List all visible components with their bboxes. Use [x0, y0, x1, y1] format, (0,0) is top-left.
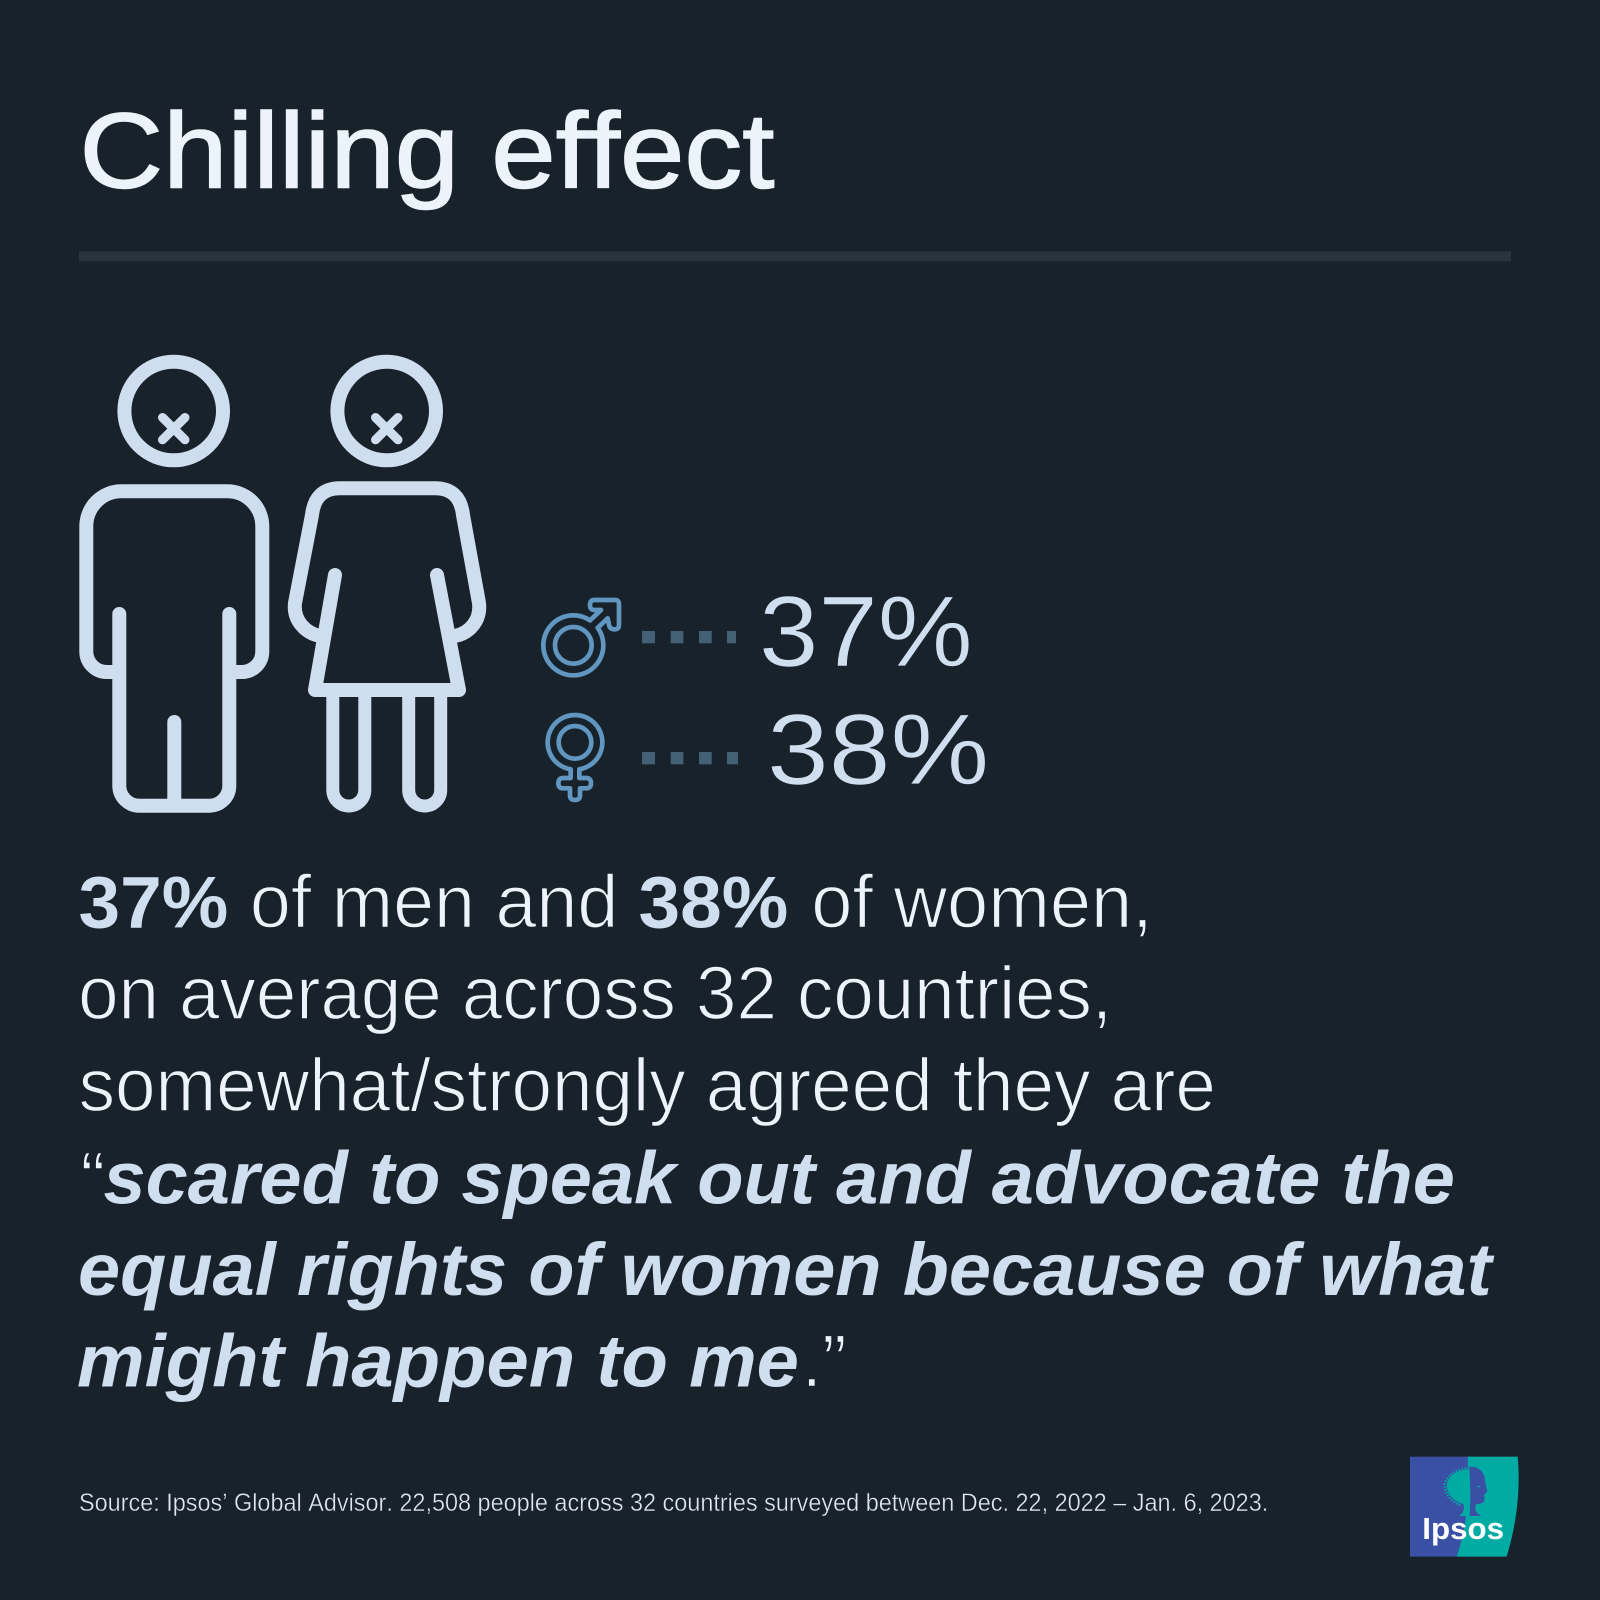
title: Chilling effect	[80, 91, 774, 211]
icon: man	[86, 362, 262, 806]
quote	[77, 1136, 1495, 1403]
icon: female symbol	[548, 715, 602, 800]
stat: women 38%: 38%	[767, 694, 989, 806]
closing punctuation: .”	[802, 1320, 847, 1403]
icon: male symbol	[543, 600, 619, 675]
line 1: 38%	[638, 861, 788, 943]
logo: Ipsos	[1410, 1457, 1519, 1557]
quote line 1: scared to speak out and advocate the	[104, 1136, 1455, 1219]
line 1	[78, 860, 1153, 943]
source note: Source: Ipsos’ Global Advisor. 22,508 people across 32 countries surveyed between Dec. 22, 2022 – Jan. 6, 2023.	[79, 1489, 1268, 1517]
stat: men 37%: 37%	[759, 575, 973, 687]
quote line 3: might happen to me	[77, 1320, 799, 1402]
opening quotation mark: “	[80, 1136, 105, 1219]
icon: woman	[295, 362, 479, 806]
line 3: somewhat/strongly agreed they are	[79, 1043, 1216, 1127]
body text	[77, 860, 1495, 1403]
line 1: of women,	[811, 860, 1153, 943]
logo: Ipsos: Ipsos	[1422, 1511, 1504, 1546]
line 2: on average across 32 countries,	[78, 951, 1112, 1035]
quote line 2: equal rights of women because of what	[78, 1228, 1495, 1311]
dotted leader: men	[642, 631, 736, 643]
icon: man and woman with crossed-out mouths	[86, 362, 479, 806]
line 1: 37%	[78, 861, 228, 943]
line 1: of men and	[250, 860, 618, 943]
dotted leader: women	[642, 752, 738, 764]
